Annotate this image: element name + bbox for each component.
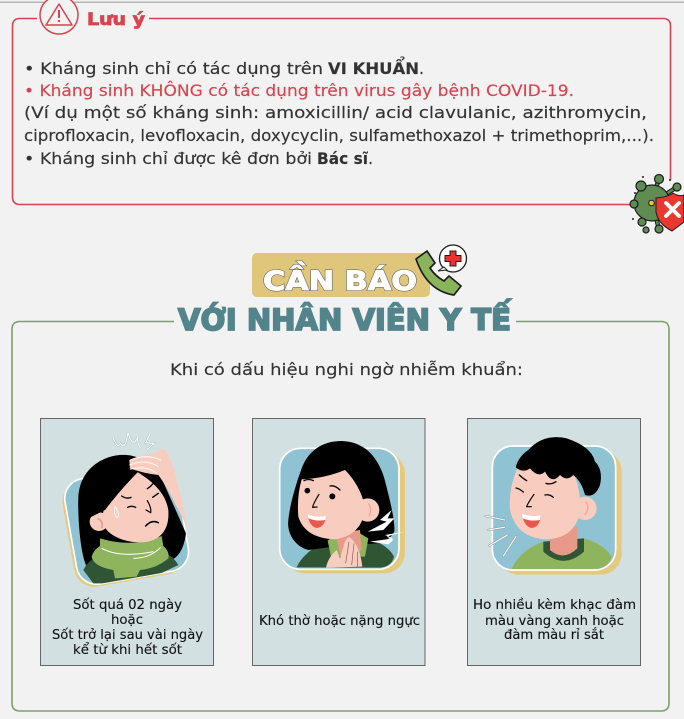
heading badge: CẦN BÁO: CẦN BÁO bbox=[263, 262, 417, 297]
text: note bullet list: (Ví dụ một số kháng sinh: amoxicillin/ acid clavulanic, azithromycin, bbox=[24, 103, 647, 122]
illustration: man coughing bbox=[486, 437, 622, 575]
text: note bullet list: VI KHUẨN bbox=[328, 56, 419, 78]
card: fever bbox=[40, 418, 214, 666]
illustration: woman short of breath bbox=[280, 441, 405, 573]
heading badge: CẦN BÁO: CẦN BÁO bbox=[263, 262, 417, 297]
text: note bullet list: • Kháng sinh KHÔNG có tác dụng trên virus gây bệnh COVID-19. bbox=[24, 81, 574, 100]
card text: cough: màu vàng xanh hoặc bbox=[485, 614, 624, 629]
card text: shortness of breath: Khó thờ hoặc nặng ngực bbox=[259, 614, 420, 629]
card text: cough: Ho nhiều kèm khạc đàm bbox=[473, 598, 636, 613]
icon: warning triangle bbox=[40, 0, 78, 34]
card: shortness of breath bbox=[252, 418, 425, 666]
heading: Lưu ý: Lưu ý bbox=[87, 10, 145, 30]
text: note bullet list: • Kháng sinh chỉ có tác dụng trên bbox=[24, 59, 323, 78]
card text: fever bbox=[52, 598, 203, 658]
card: cough bbox=[468, 418, 640, 666]
icon: phone and medical cross bubble bbox=[416, 245, 466, 295]
text: note bullet list: . bbox=[368, 149, 373, 168]
icon: virus with shield bbox=[630, 174, 684, 233]
text: note bullet list bbox=[24, 56, 654, 168]
text: note bullet list: • Kháng sinh chỉ được kê đơn bởi bbox=[24, 149, 312, 168]
heading: VỚI NHÂN VIÊN Y TẾ: VỚI NHÂN VIÊN Y TẾ bbox=[178, 300, 511, 337]
illustration: woman with fever bbox=[59, 433, 192, 590]
card text: cough bbox=[473, 598, 636, 643]
heading badge: CẦN BÁO bbox=[252, 253, 430, 297]
text: note bullet list: Bác sĩ bbox=[317, 149, 368, 168]
panel: report to medical staff bbox=[12, 245, 669, 711]
text: note bullet list: ciprofloxacin, levofloxacin, doxycyclin, sulfamethoxazol + trimethoprim,...). bbox=[24, 126, 654, 145]
text: intro sentence: Khi có dấu hiệu nghi ngờ nhiễm khuẩn: bbox=[170, 360, 523, 379]
text: note bullet list: . bbox=[419, 59, 424, 78]
card text: fever: Sốt trở lại sau vài ngày bbox=[52, 628, 203, 643]
card text: fever: Sốt quá 02 ngày bbox=[73, 598, 182, 613]
card text: cough: đàm màu rỉ sắt bbox=[504, 628, 604, 643]
panel: warning note bbox=[12, 0, 670, 204]
card text: fever: kể từ khi hết sốt bbox=[73, 643, 182, 658]
card text: fever: hoặc bbox=[111, 613, 143, 628]
